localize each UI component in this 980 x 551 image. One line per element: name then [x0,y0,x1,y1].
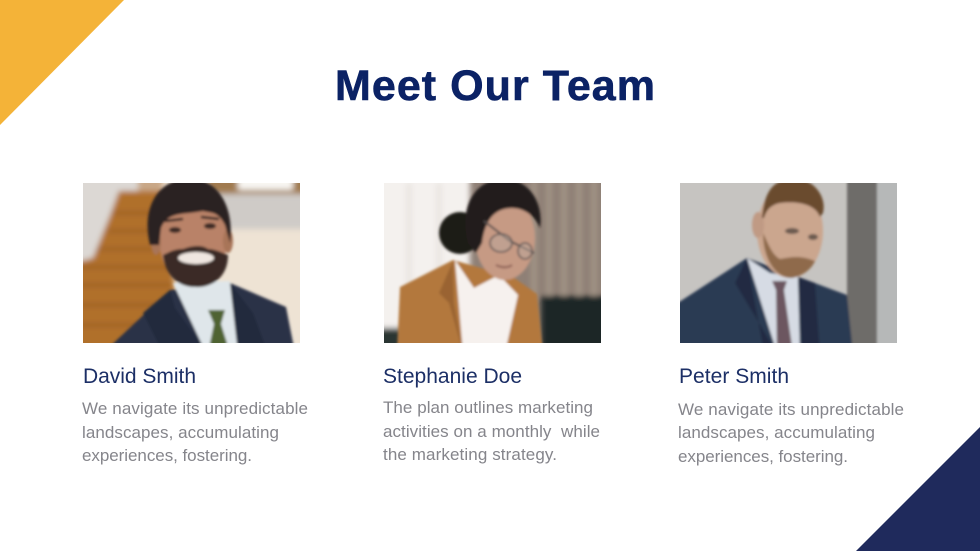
title: Meet Our Team [335,62,655,110]
photo: David Smith [83,183,300,343]
description [383,398,600,464]
panel: Peter Smith [670,173,907,466]
description: landscapes, accumulating [678,423,875,442]
description: The plan outlines marketing [383,398,593,417]
description [678,400,904,466]
description: experiences, fostering. [82,446,252,465]
name: Stephanie Doe [383,365,522,388]
description: the marketing strategy. [383,445,557,464]
photo: Stephanie Doe [384,183,601,343]
panel: Stephanie Doe [383,183,601,464]
name: David Smith [83,365,196,388]
description: We navigate its unpredictable [82,399,308,418]
panel: David Smith [73,173,310,465]
decorative corner: yellow triangle [0,0,124,125]
decorative corner: navy triangle [856,427,980,551]
description: experiences, fostering. [678,447,848,466]
name: Peter Smith [679,365,789,388]
description [82,399,308,465]
description: We navigate its unpredictable [678,400,904,419]
description: landscapes, accumulating [82,423,279,442]
description: activities on a monthly while [383,422,600,441]
photo: Peter Smith [680,183,897,343]
